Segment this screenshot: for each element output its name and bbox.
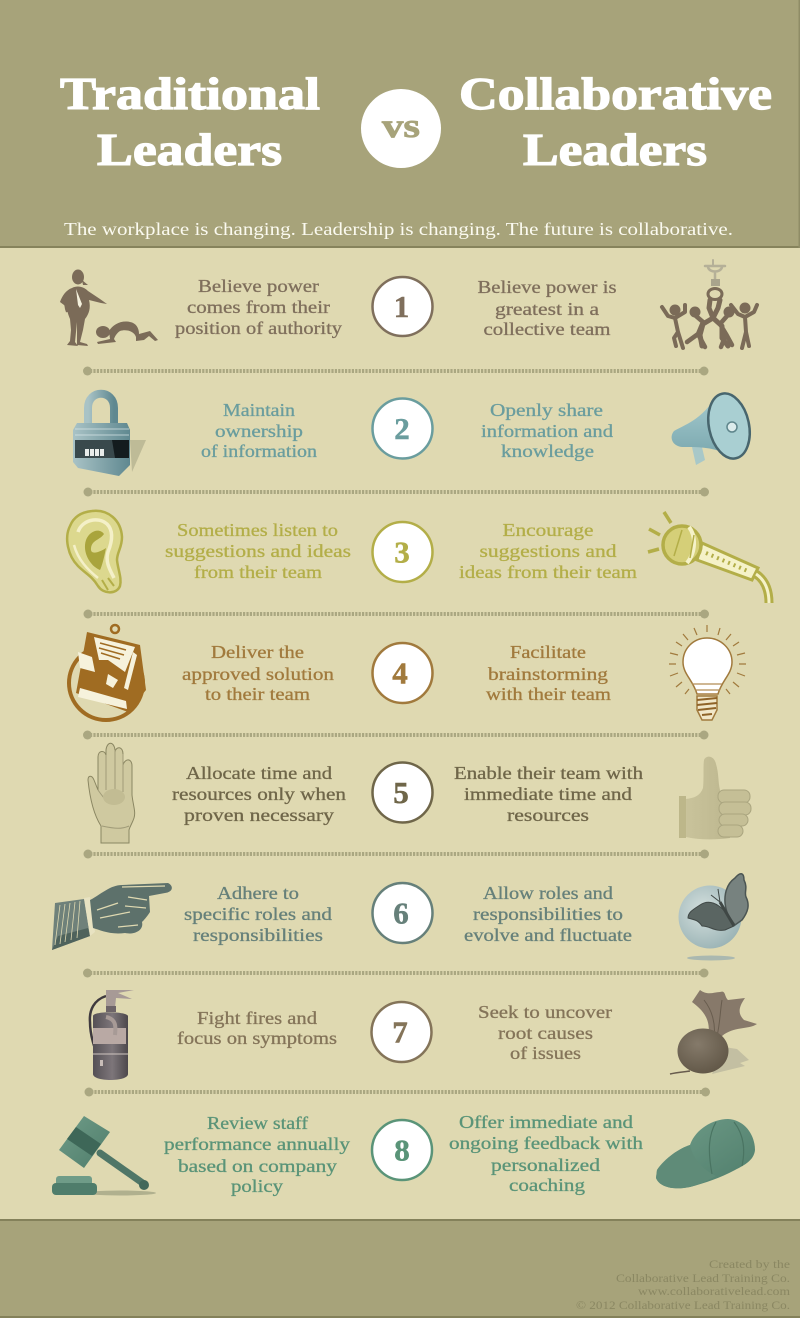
text: traditional 8: based on company [178,1156,337,1176]
icon: raised hand [88,743,135,843]
icon: engraved pointing hand [52,883,172,950]
text: traditional 5: proven necessary [184,805,334,825]
icon: team lifting trophy [662,260,757,348]
panel: row 5 resources [88,743,751,843]
icon: thumbs up [679,757,751,839]
text: traditional 5: resources only when [172,784,346,804]
text: traditional 2: Maintain [223,400,295,420]
text: traditional 6 [184,883,332,945]
text: collaborative 6: evolve and fluctuate [464,925,632,945]
divider 7 [84,1088,710,1096]
text: traditional 7: focus on symptoms [177,1028,337,1048]
text: collaborative 8 [449,1112,643,1195]
text: collaborative 3 [459,520,637,582]
icon: microphone [648,512,769,603]
text: traditional 1 [175,276,342,338]
text: collaborative 3: ideas from their team [459,562,637,582]
text: collaborative 3: suggestions and [480,541,617,561]
number 4 [372,643,432,703]
number 5: 5 [393,775,409,810]
text: collaborative 6: Allow roles and [483,883,613,903]
credits: www.collaborativelead.com [638,1286,790,1298]
text: traditional 6: responsibilities [193,925,323,945]
icon: megaphone [672,390,755,465]
text: collaborative 6 [464,883,632,945]
divider 2 [84,488,709,496]
text: traditional 5 [172,763,346,825]
divider 3 [84,610,709,618]
text: collaborative 1 [478,277,617,339]
text: collaborative 8: ongoing feedback with [449,1133,643,1153]
divider 5 [84,850,709,858]
text: collaborative 4: Facilitate [510,642,586,662]
icon: baseball cap [656,1119,755,1188]
number 6 [372,883,432,943]
icon: boss pointing at kneeling man [60,270,158,346]
text: traditional 4: Deliver the [211,642,304,662]
icon: clipboard in hand [69,625,146,720]
text: traditional 8 [164,1113,350,1196]
text: traditional 1: position of authority [175,318,342,338]
text: traditional 7 [177,1008,337,1048]
icon: combination padlock [73,394,146,476]
icon: butterfly on globe [678,874,748,960]
panel: row 2 information [73,390,755,476]
text: traditional 8: Review staff [207,1113,308,1133]
number 6: 6 [393,896,409,930]
number 3 [372,522,432,582]
text: collaborative 8: coaching [509,1175,585,1195]
text: collaborative 3: Encourage [502,520,594,540]
text: collaborative 4: with their team [486,684,611,704]
text: traditional 3 [165,520,351,582]
text: traditional 4 [182,642,334,704]
number 1 [372,277,432,336]
text: collaborative 8: personalized [491,1155,600,1175]
text: collaborative 1: greatest in a [495,299,599,319]
title: collaborative leaders [459,69,772,175]
text: collaborative 2: information and [481,421,613,441]
text: traditional 6: specific roles and [184,904,332,924]
panel: footer [0,1219,800,1318]
text: traditional 8: performance annually [164,1134,350,1154]
badge: vs [361,89,441,168]
text: collaborative 7 [478,1002,612,1063]
text: collaborative 7: Seek to uncover [478,1002,612,1022]
text: traditional 3: Sometimes listen to [177,520,338,540]
text: traditional 5: Allocate time and [186,763,332,783]
text: traditional 4: to their team [205,684,310,704]
credits [576,1259,790,1312]
text: collaborative 2: knowledge [501,441,594,461]
text: collaborative 7: root causes [498,1023,593,1043]
number 5 [372,762,432,822]
text: traditional 7: Fight fires and [197,1008,317,1028]
number 2: 2 [394,411,410,446]
panel: header [0,0,800,248]
text: collaborative 8: Offer immediate and [459,1112,633,1132]
text: traditional 2: of information [201,441,317,461]
icon: fire extinguisher [90,990,134,1080]
text: collaborative 2: Openly share [490,400,603,420]
badge: vs: vs [382,108,420,145]
divider 1 [83,366,708,376]
text: collaborative 5: resources [507,805,589,825]
text: collaborative 6: responsibilities to [473,904,623,924]
title: traditional leaders [60,69,320,175]
title: traditional leaders: Traditional [60,69,320,119]
panel: row 4 solution [69,625,746,720]
number 3: 3 [394,534,410,570]
title: collaborative leaders: Leaders [523,125,707,175]
panel: row 8 feedback [52,1112,755,1196]
divider 6 [83,968,708,978]
number 8: 8 [394,1132,410,1168]
text: traditional 1: Believe power [198,276,319,296]
credits: Created by the [709,1259,790,1271]
credits: © 2012 Collaborative Lead Training Co. [576,1300,790,1312]
panel: row 1 power [60,260,757,348]
number 8 [372,1120,432,1180]
divider 4 [83,730,708,740]
text: collaborative 5 [454,763,643,825]
text: collaborative 5: Enable their team with [454,763,643,783]
text: traditional 1: comes from their [187,297,330,317]
credits: Collaborative Lead Training Co. [616,1273,790,1285]
icon: light bulb [669,625,746,720]
text: collaborative 4: brainstorming [488,664,608,684]
text: collaborative 1: collective team [484,319,611,339]
text: traditional 2: ownership [215,421,303,441]
text: traditional 2 [201,400,317,461]
number 7: 7 [392,1014,408,1050]
text: traditional 3: suggestions and ideas [165,541,351,561]
number 2 [372,398,432,458]
text: traditional 6: Adhere to [217,883,299,903]
number 7 [372,1002,432,1062]
icon: beet with root [670,990,757,1074]
text: collaborative 4 [486,642,611,704]
number 4: 4 [392,656,408,690]
title: collaborative leaders: Collaborative [459,69,772,119]
panel: row 6 roles [52,874,748,960]
text: traditional 8: policy [231,1176,283,1196]
text: traditional 3: from their team [194,562,322,582]
text: traditional 4: approved solution [182,664,334,684]
text: collaborative 1: Believe power is [478,277,617,297]
icon: gavel [52,1116,156,1196]
title: traditional leaders: Leaders [97,125,282,175]
tagline: The workplace is changing. Leadership is changing. The future is collaborative. [64,219,733,239]
panel: row 7 root causes [90,990,757,1080]
text: collaborative 7: of issues [510,1043,581,1063]
panel: row 3 listening [67,511,769,603]
text: collaborative 5: immediate time and [464,784,632,804]
number 1: 1 [394,289,409,324]
text: collaborative 2 [481,400,613,461]
icon: ear [67,511,122,592]
